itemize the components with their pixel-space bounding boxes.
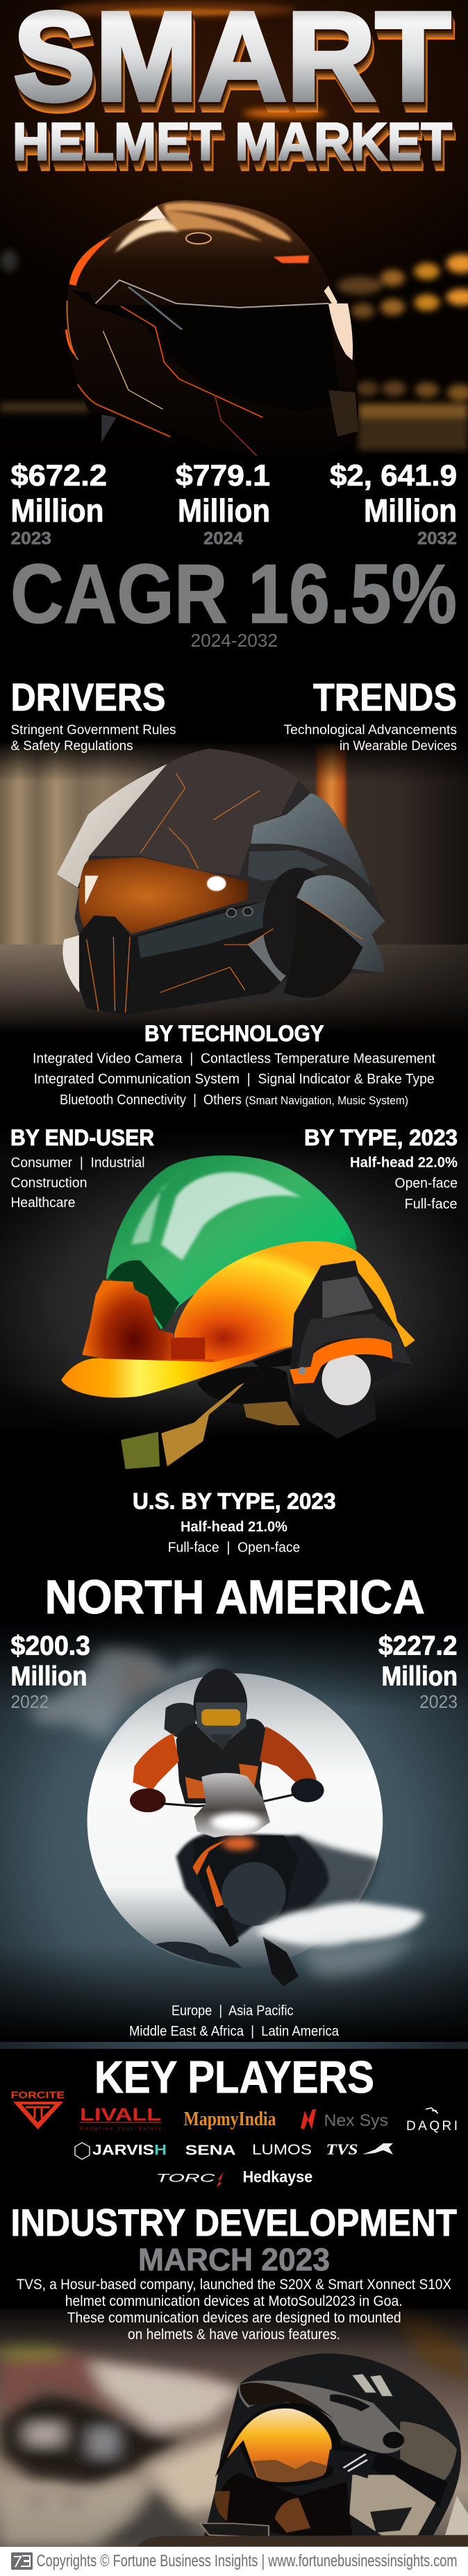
logo: Forcite [11, 2089, 65, 2129]
heading: north america: NORTH AMERICA [44, 1570, 425, 1624]
stat: north america 2023 [378, 1631, 458, 1712]
title: SMART HELMET MARKET: HELMET MARKET [12, 113, 452, 172]
illustration: black motorcycle helmet with copper highlights [66, 200, 358, 456]
logo: Forcite: FORCITE [11, 2089, 65, 2100]
text: by type 2023 [304, 1125, 458, 1212]
illustration: green and orange safety helmet with ear muff [61, 1156, 415, 1469]
logo: Livall: LIVALL [80, 2105, 161, 2125]
stat: market size 2032: $2, 641.9 [330, 459, 457, 492]
text: other regions: Europe | Asia Pacific [172, 2003, 293, 2018]
logo: Daqri: DAQRI [406, 2119, 458, 2134]
logo: MapmyIndia: MapmyIndia [183, 2109, 276, 2130]
text: industry development description: These communication devices are designed to mounted [67, 2310, 401, 2326]
logo: Hedkayse: Hedkayse [243, 2168, 312, 2186]
text: trends [283, 675, 457, 754]
stat: north america 2022 [11, 1631, 90, 1712]
text: by end-user: BY END-USER [10, 1125, 154, 1150]
logo: Torc: TORC [156, 2171, 216, 2185]
text: by end-user: Consumer | Industrial [11, 1156, 144, 1171]
stat: north america 2022: 2022 [11, 1691, 49, 1712]
panel: helmet four background [0, 2292, 468, 2547]
stat: market size 2024: 2024 [203, 529, 243, 549]
text: industry development description: on helmets & have various features. [128, 2327, 340, 2343]
illustration: motorcycle rider in snow inside a circle [30, 1649, 424, 1986]
stat: market size 2024: Million [178, 492, 270, 529]
text: other regions [129, 2003, 340, 2039]
illustration: ski helmet with amber goggles [137, 2353, 468, 2546]
stat: market size 2032 [330, 459, 457, 549]
logo: Torc [156, 2171, 224, 2187]
text: industry development description [17, 2277, 451, 2343]
text: industry development description: helmet communication devices at MotoSoul2023 in Goa. [65, 2293, 403, 2309]
text: U.S. by type 2023 [133, 1489, 336, 1556]
text: trends: in Wearable Devices [340, 739, 457, 754]
stat: north america 2023: Million [382, 1661, 458, 1692]
text: by technology [33, 1021, 435, 1108]
illustration: futuristic grey helmet with orange visor [57, 749, 385, 1015]
background bokeh lights [0, 250, 468, 450]
panel: helmet three background [0, 1129, 468, 1441]
text: by technology: Integrated Communication System | Signal Indicator & Brake Type [34, 1072, 435, 1087]
text: drivers: & Safety Regulations [11, 739, 133, 754]
logo: Livall [80, 2105, 161, 2132]
logo: TVS: TVS [326, 2141, 358, 2158]
logo: Jarvish: JARVIS H [92, 2142, 167, 2159]
footer: copyright bar [0, 2547, 468, 2576]
stat: market size 2032: 2032 [417, 529, 457, 549]
text: drivers: DRIVERS [11, 675, 165, 719]
text: by type 2023: Half-head 22.0% [350, 1154, 458, 1171]
stat: north america 2022: Million [11, 1661, 87, 1692]
heading: industry development [11, 2201, 457, 2277]
heading: industry development: MARCH 2023 [138, 2242, 330, 2277]
text: U.S. by type 2023: Full-face | Open-face [168, 1540, 300, 1556]
panel: header background [0, 0, 468, 472]
heading: key players: KEY PLAYERS [94, 2052, 374, 2102]
text: other regions: Middle East & Africa | Latin America [129, 2024, 340, 2039]
text: by technology: Bluetooth Connectivity | Others (Smart Navigation, Music System) [60, 1092, 408, 1108]
logo: Sena: SENA [185, 2143, 236, 2159]
text: by technology: Integrated Video Camera | Contactless Temperature Measurement [33, 1052, 435, 1067]
stat: market size 2023: $672.2 [11, 459, 107, 492]
logo: NexSys: Nex Sys [324, 2111, 388, 2130]
logos: key players [11, 2089, 458, 2187]
stat: market size 2024 [176, 459, 270, 549]
text: drivers: Stringent Government Rules [11, 723, 176, 738]
panel: helmet two background [0, 740, 468, 1035]
text: by type 2023: BY TYPE, 2023 [304, 1125, 458, 1150]
logo: Lumos: LUMOS [252, 2142, 312, 2158]
logo: TVS [326, 2141, 393, 2158]
text: by technology: BY TECHNOLOGY [144, 1021, 324, 1046]
logo: NexSys [301, 2109, 388, 2130]
text: drivers [11, 675, 176, 754]
stat: market size 2024: $779.1 [176, 459, 270, 492]
panel: north america background [0, 1618, 468, 2049]
stat: market size 2023: 2023 [11, 529, 51, 549]
logo: Daqri [406, 2108, 458, 2134]
text: by type 2023: Open-face [394, 1176, 458, 1191]
text: trends: Technological Advancements [283, 723, 457, 738]
text: U.S. by type 2023: Half-head 21.0% [181, 1519, 287, 1535]
text: by end-user [10, 1125, 154, 1211]
icon: Fortune Business Insights logo [11, 2552, 33, 2570]
text: by end-user: Construction [11, 1175, 87, 1190]
logo: Livall: Redefine Your Safety [80, 2125, 161, 2132]
stat: CAGR: 2024-2032 [190, 630, 278, 651]
stat: market size 2032: Million [364, 492, 457, 529]
stat: market size 2023: Million [11, 492, 104, 529]
stat: north america 2023: 2023 [419, 1691, 458, 1712]
stat: north america 2023: $227.2 [378, 1631, 457, 1661]
text: by type 2023: Full-face [405, 1197, 458, 1212]
stat: market size 2023 [11, 459, 107, 549]
stat: north america 2022: $200.3 [11, 1631, 90, 1661]
text: U.S. by type 2023: U.S. BY TYPE, 2023 [133, 1489, 336, 1514]
text: by end-user: Healthcare [11, 1195, 75, 1211]
